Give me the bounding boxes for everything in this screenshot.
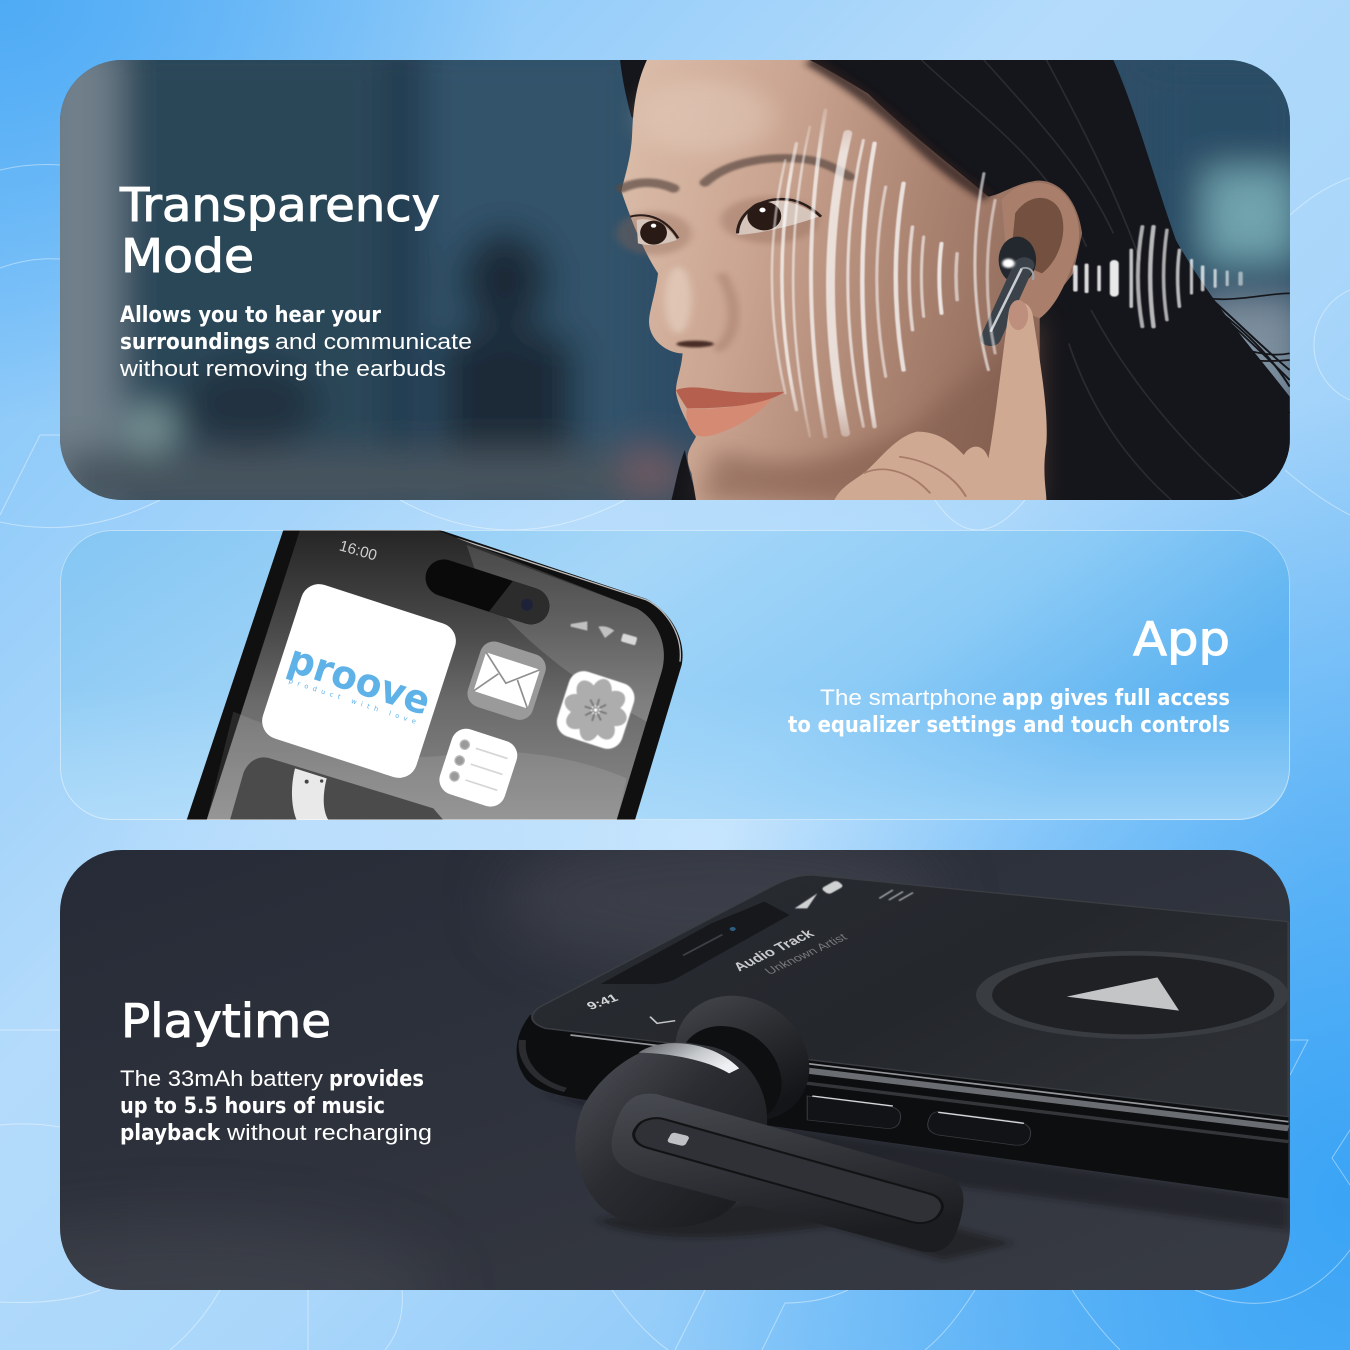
text: transparency description: and communicate — [275, 329, 472, 354]
earbud shell — [575, 1042, 767, 1228]
nose — [665, 267, 733, 350]
app icon: mail — [468, 642, 546, 720]
earbud stem — [612, 1094, 964, 1252]
status icons — [571, 621, 637, 645]
phone with app icons — [187, 530, 683, 820]
text: playtime description: The 33mAh battery — [120, 1066, 323, 1091]
blurred office background — [60, 60, 1290, 500]
heading: App: App — [1133, 612, 1230, 666]
photo: woman with earbud — [616, 60, 1290, 500]
status bar time: 16:00 — [337, 538, 379, 564]
text: transparency description: surroundings — [120, 330, 270, 355]
text: transparency description: Allows you to hear your — [120, 303, 381, 328]
phone and earbud photo: Unknown Artist — [761, 931, 850, 977]
play button — [976, 951, 1288, 1039]
heading: Transparency Mode: Transparency — [119, 178, 440, 232]
text: transparency description: without removing the earbuds — [119, 356, 446, 381]
panel: transparency mode — [60, 60, 1290, 500]
earbud — [991, 237, 1036, 338]
dynamic island — [426, 559, 550, 624]
text: playtime description: playback — [120, 1121, 221, 1146]
panel: playtime — [60, 850, 1290, 1290]
phone screen — [207, 530, 664, 820]
jaw shadow — [700, 313, 1040, 500]
bottom widget — [230, 757, 443, 820]
forehead highlight — [640, 80, 774, 153]
phone shadow — [540, 1093, 1288, 1230]
phone screen — [532, 875, 1288, 1117]
phone and earbud photo — [517, 875, 1288, 1260]
eyes — [616, 197, 821, 255]
app icon: reminders — [439, 728, 518, 807]
app icon: photos — [556, 670, 636, 750]
app icon: proove — [257, 579, 461, 783]
heading: Transparency Mode — [119, 186, 440, 273]
screen text: Audio Track — [730, 927, 818, 974]
app icon: proove: proove — [282, 636, 436, 725]
phone and earbud photo: 9:41 — [584, 992, 621, 1012]
text: app description: app gives full access — [1002, 686, 1230, 711]
phone body — [187, 530, 683, 820]
text: playtime description: up to 5.5 hours of music — [120, 1094, 385, 1119]
face and neck — [621, 60, 1082, 500]
text: app description: to equalizer settings and touch controls — [788, 713, 1230, 738]
ear — [1002, 183, 1079, 318]
heading: Transparency Mode: Mode — [121, 229, 254, 283]
text: app description: The smartphone — [820, 685, 997, 710]
lips — [676, 387, 785, 436]
phone side buttons — [807, 1096, 1031, 1145]
heading: Playtime: Playtime — [121, 994, 331, 1048]
hair — [620, 60, 1290, 500]
panel: app — [60, 530, 1290, 820]
notch — [601, 902, 790, 984]
text: app description — [788, 685, 1230, 738]
ear tip — [656, 987, 827, 1131]
soft hairline — [810, 60, 988, 197]
status icons — [795, 880, 913, 908]
eyebrows — [621, 158, 850, 188]
app icon: proove: product with love — [288, 677, 417, 726]
text: playtime description: without recharging — [226, 1120, 432, 1145]
text: transparency description — [119, 303, 472, 381]
sound waves — [772, 110, 1241, 437]
hand — [834, 300, 1047, 500]
phone body — [517, 1015, 1288, 1198]
text: playtime description — [120, 1066, 432, 1146]
earbud — [575, 987, 1014, 1260]
text: playtime description: provides — [329, 1067, 424, 1092]
